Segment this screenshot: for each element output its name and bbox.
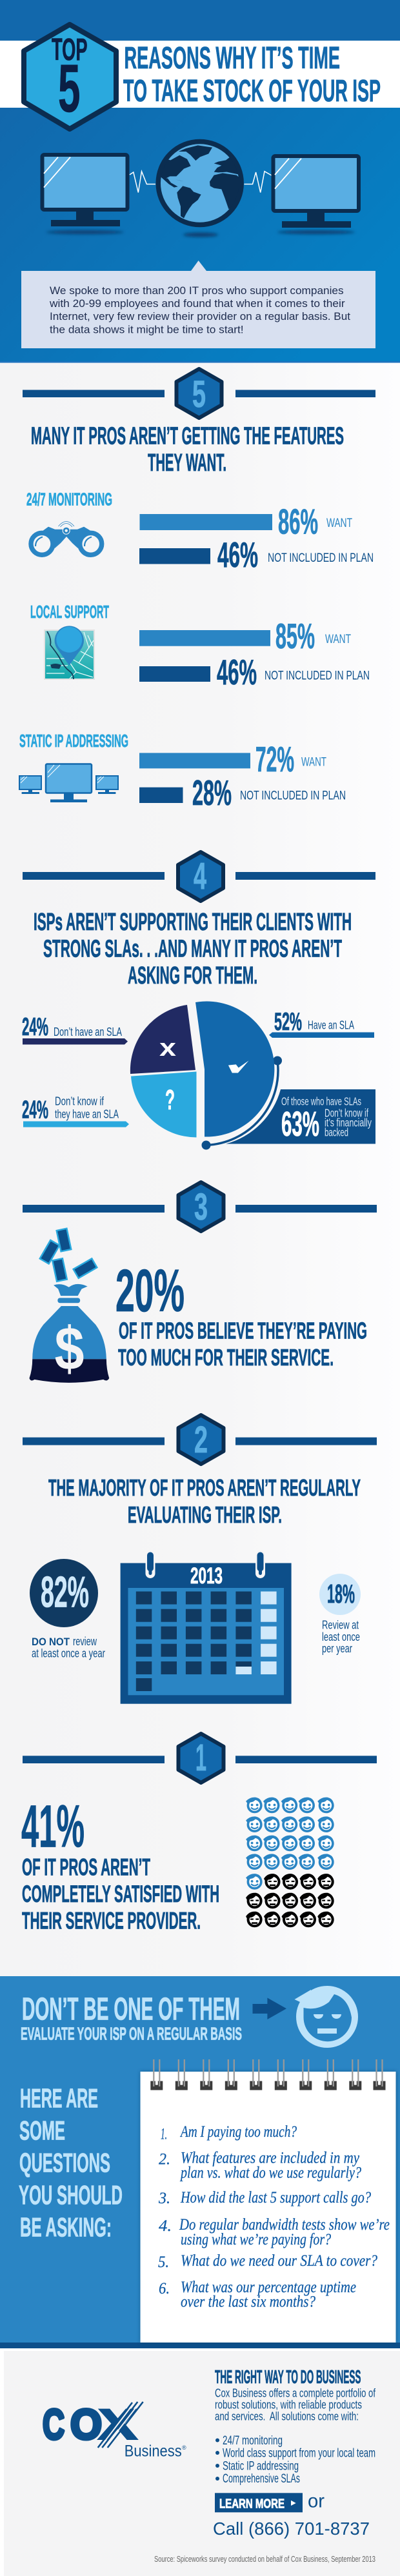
slice: don't know xyxy=(131,1072,196,1138)
section divider 1: 1 xyxy=(195,1737,206,1779)
page background xyxy=(0,362,400,1977)
stat: 41%: THEIR SERVICE PROVIDER. xyxy=(22,1908,201,1934)
section divider 5 xyxy=(23,369,375,418)
slice: have an SLA xyxy=(195,1002,274,1137)
bar: want 85%: 85% xyxy=(275,616,315,656)
question 2: What features are included in my xyxy=(181,2150,360,2167)
icon: three monitors xyxy=(19,764,118,802)
panel: reason 1 xyxy=(21,1734,377,1934)
heading: DON’T BE ONE OF THEM xyxy=(22,1992,240,2026)
callout: intro: the data shows it might be time to start! xyxy=(50,324,244,335)
icon: money bag with bills xyxy=(29,1229,109,1383)
logo: Cox Business: X xyxy=(99,2401,137,2448)
question 6: What was our percentage uptime xyxy=(181,2279,356,2296)
bar: not included 46%: 46% xyxy=(217,535,258,575)
question 3: 3. xyxy=(158,2190,170,2207)
panel: reason 5 xyxy=(19,369,375,813)
callout box: financially backed: backed xyxy=(325,1126,348,1139)
section divider 2: 2 xyxy=(194,1419,208,1461)
text: here are some questions xyxy=(19,2083,123,2242)
question 2: plan vs. what do we use regularly? xyxy=(179,2165,361,2181)
heading xyxy=(31,423,344,477)
heading: EVALUATE YOUR ISP ON A REGULAR BASIS xyxy=(21,2023,242,2043)
slice: don't know: ? xyxy=(165,1084,175,1116)
button: learn more xyxy=(215,2493,303,2512)
icon: money bag with bills: $ xyxy=(54,1314,84,1383)
pictogram: faces xyxy=(246,1798,334,1926)
title badge: top 5: 5 xyxy=(58,51,80,126)
slice: don't have an SLA xyxy=(130,1005,195,1074)
label: 24% don't know: 24% xyxy=(22,1096,48,1124)
list: features xyxy=(215,2434,375,2486)
icon: unhappy face xyxy=(294,1986,358,2048)
arrow xyxy=(253,1998,286,2019)
icon: pulse line right xyxy=(244,172,272,192)
stat: 82%: 82% xyxy=(41,1568,89,1617)
bar: want 86%: 86% xyxy=(278,502,318,542)
list: features: 24/7 monitoring xyxy=(223,2434,283,2448)
title badge: top 5 xyxy=(24,25,116,129)
bar: want 86% xyxy=(139,502,352,542)
section divider 3: 3 xyxy=(194,1186,208,1228)
question 1: 1. xyxy=(161,2126,167,2143)
callout: intro: Internet, very few review their provider on a regular basis. But xyxy=(50,311,350,322)
section divider 4 xyxy=(23,852,375,901)
heading: EVALUATING THEIR ISP. xyxy=(128,1501,282,1528)
bar: want 85% xyxy=(139,616,351,656)
question 2: 2. xyxy=(159,2150,170,2168)
feature: static IP addressing: STATIC IP ADDRESSING xyxy=(19,731,128,751)
title xyxy=(123,41,381,108)
text: here are some questions: HERE ARE xyxy=(20,2083,98,2114)
panel: reason 2 xyxy=(23,1415,377,1704)
title badge: top 5: TOP xyxy=(52,33,88,67)
question 1 xyxy=(161,2123,297,2143)
icon: map pin xyxy=(45,626,94,679)
question 6: 6. xyxy=(159,2280,170,2297)
feature: local support: LOCAL SUPPORT xyxy=(30,602,109,622)
text: here are some questions: SOME xyxy=(19,2115,65,2145)
stat: 82%: review xyxy=(73,1635,97,1648)
question 6 xyxy=(159,2279,356,2311)
label: 24% don't have an SLA xyxy=(22,1013,128,1045)
label: 24% don't know: Don’t know if xyxy=(55,1095,105,1108)
stat: 41% xyxy=(21,1792,219,1934)
question 1: Am I paying too much? xyxy=(179,2123,297,2141)
question 4 xyxy=(159,2216,390,2248)
notepad rings xyxy=(150,2059,386,2090)
callout box: financially backed: 63% xyxy=(281,1105,319,1144)
bar: not included 28%: NOT INCLUDED IN PLAN xyxy=(240,788,346,802)
feature: 24/7 monitoring: 24/7 MONITORING xyxy=(26,490,112,510)
callout: intro: with 20-99 employees and found that when it comes to their xyxy=(49,298,345,310)
stat: 82%: at least once a year xyxy=(32,1647,105,1660)
text: here are some questions: YOU SHOULD xyxy=(19,2180,123,2210)
stat: 18%: per year xyxy=(322,1642,352,1655)
stat: 41%: COMPLETELY SATISFIED WITH xyxy=(22,1881,219,1907)
icon: pulse line left xyxy=(130,172,155,192)
callout box: financially backed: it’s financially xyxy=(325,1116,372,1129)
stat: 82%: DO NOT xyxy=(32,1636,70,1648)
bar: not included 28%: 28% xyxy=(192,773,232,813)
bar: not included 46% xyxy=(139,652,370,692)
text: phone number: Call (866) 701-8737 xyxy=(213,2519,370,2539)
notepad xyxy=(141,2059,396,2343)
bar: want 72%: 72% xyxy=(255,739,294,779)
heading xyxy=(34,909,352,989)
section divider 2 xyxy=(23,1415,377,1464)
label: 52% have an SLA xyxy=(269,1008,374,1038)
slice: don't have an SLA: x xyxy=(159,1035,176,1062)
icon: flying bills xyxy=(40,1229,97,1282)
label: 52% have an SLA: 52% xyxy=(274,1008,302,1036)
text: here are some questions: BE ASKING: xyxy=(20,2212,112,2242)
stat: 20% xyxy=(115,1257,367,1371)
logo: Cox Business xyxy=(43,2401,186,2460)
bar: not included 28% xyxy=(139,773,346,813)
callout: intro: We spoke to more than 200 IT pros who support companies xyxy=(50,285,344,297)
question 5: 5. xyxy=(158,2254,169,2271)
label: 24% don't know xyxy=(22,1095,129,1127)
list: features: Comprehensive SLAs xyxy=(223,2472,300,2486)
question 2 xyxy=(159,2150,361,2181)
question 4: using what we’re paying for? xyxy=(181,2231,331,2248)
bar: want 72% xyxy=(139,739,326,779)
panel: footer xyxy=(0,2348,400,2576)
calendar xyxy=(121,1552,292,1704)
bar: want 85%: WANT xyxy=(325,632,351,646)
question 4: 4. xyxy=(159,2217,172,2235)
calendar: 2013 xyxy=(190,1563,223,1589)
heading: THEY WANT. xyxy=(148,450,226,477)
label: 24% don't have an SLA: 24% xyxy=(22,1013,48,1041)
heading xyxy=(21,1992,242,2043)
callout box: financially backed xyxy=(201,1056,375,1149)
logo: Cox Business: Business xyxy=(125,2442,182,2460)
section divider 5: 5 xyxy=(192,373,206,415)
panel: header xyxy=(0,0,400,362)
feature: static IP addressing xyxy=(19,731,346,813)
bar: want 72%: WANT xyxy=(301,755,326,769)
feature: local support xyxy=(30,602,370,692)
callout: intro xyxy=(21,261,375,348)
label: 24% don't have an SLA: Don’t have an SLA xyxy=(54,1025,122,1038)
pie chart xyxy=(130,1002,375,1149)
icon: right monitor xyxy=(274,156,359,234)
section divider 4: 4 xyxy=(194,855,206,897)
logo: Cox Business: O xyxy=(70,2401,102,2448)
stat: 20%: 20% xyxy=(115,1257,185,1324)
label: 52% have an SLA: Have an SLA xyxy=(308,1019,354,1032)
logo: Cox Business: C xyxy=(43,2401,65,2448)
calendar grid xyxy=(136,1592,252,1691)
icon: left monitor xyxy=(43,155,128,234)
panel: reason 3 xyxy=(23,1182,377,1383)
bar: not included 46%: 46% xyxy=(217,652,257,692)
button: learn more: LEARN MORE xyxy=(219,2497,285,2511)
label: 24% don't know: they have an SLA xyxy=(55,1108,119,1121)
stat: 82% xyxy=(30,1559,105,1660)
panel: don't be one of them xyxy=(0,1976,400,2348)
feature: 24/7 monitoring xyxy=(26,490,374,575)
section divider 1 xyxy=(23,1734,377,1783)
panel: reason 4 xyxy=(22,852,375,1149)
text: the right way to do business xyxy=(215,2367,376,2422)
stat: 41%: 41% xyxy=(21,1792,85,1859)
question 6: over the last six months? xyxy=(181,2294,315,2311)
bar: not included 46% xyxy=(139,535,374,575)
stat: 18% xyxy=(319,1574,361,1655)
heading: ASKING FOR THEM. xyxy=(128,962,257,989)
text: here are some questions: QUESTIONS xyxy=(19,2148,110,2178)
section divider 3 xyxy=(23,1182,377,1231)
heading xyxy=(48,1474,361,1528)
stat: 18%: least once xyxy=(322,1630,360,1643)
text: or: or xyxy=(308,2491,325,2512)
list: features: Static IP addressing xyxy=(223,2459,299,2473)
logo: Cox Business: ® xyxy=(182,2444,186,2451)
stat: 41%: OF IT PROS AREN’T xyxy=(22,1854,150,1880)
stat: 18%: Review at xyxy=(322,1619,359,1632)
bar: want 86%: WANT xyxy=(326,516,352,530)
callout box: financially backed: Don’t know if xyxy=(325,1107,368,1120)
icon: globe xyxy=(154,141,246,237)
stat: 18%: 18% xyxy=(327,1579,355,1609)
icon: binoculars xyxy=(31,521,102,555)
